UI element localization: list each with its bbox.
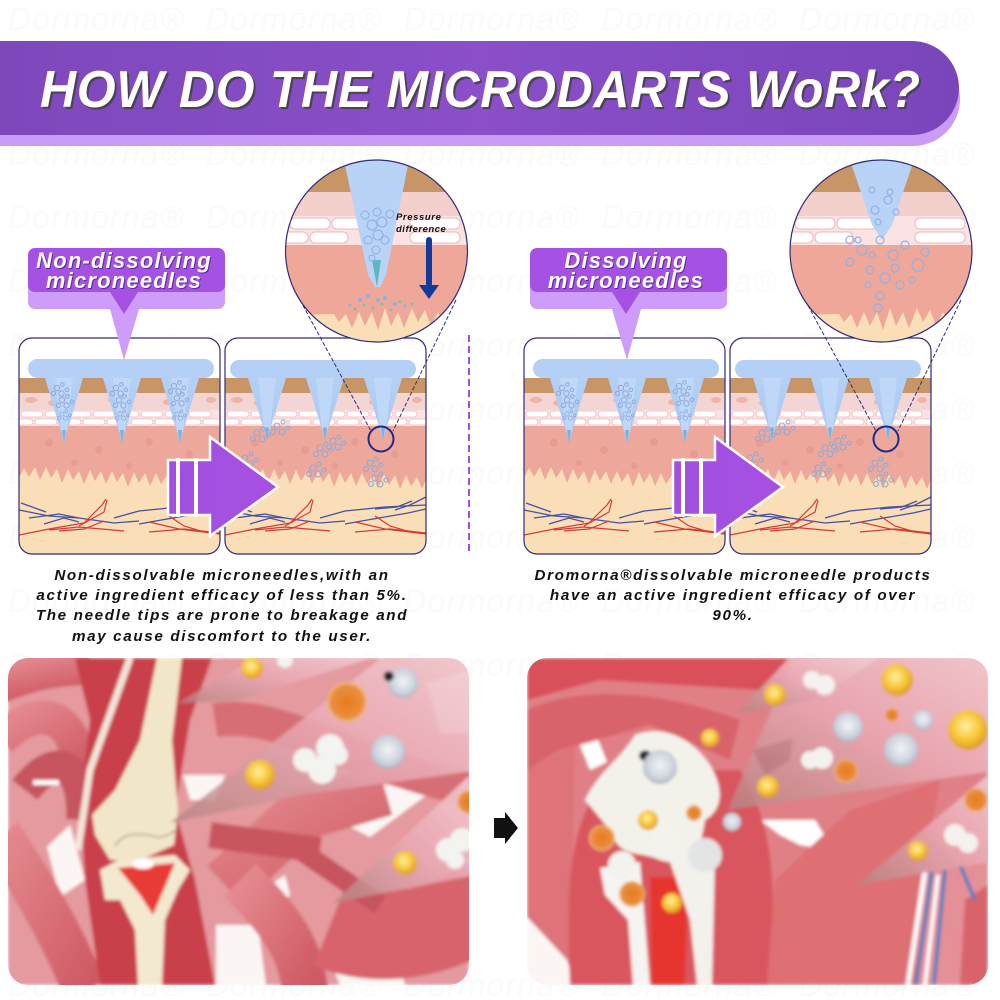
pressure arrow (426, 240, 432, 284)
magnifier: left zoom (282, 160, 469, 452)
callout: non-dissolving: microneedles (46, 268, 202, 293)
needle tips (728, 655, 1000, 810)
caption: dissolving: 90%. (712, 607, 754, 624)
divider (468, 335, 470, 553)
caption: non-dissolving: Non-dissolvable microneedles,with an (54, 567, 390, 584)
magnifier: left zoom: difference (396, 224, 446, 235)
callout: dissolving (530, 248, 727, 360)
caption: dissolving: have an active ingredient efficacy of over (550, 587, 916, 604)
caption: dissolving (534, 567, 932, 624)
callout: non-dissolving: Non-dissolving (36, 248, 212, 273)
tibia bone (100, 855, 190, 985)
caption: non-dissolving: may cause discomfort to the user. (72, 628, 372, 645)
image: knee before treatment (0, 652, 490, 990)
caption: non-dissolving: active ingredient efficacy of less than 5%. (36, 587, 408, 604)
gaps (527, 917, 575, 985)
title text: HOW DO THE MICRODARTS WoRk? (40, 60, 920, 118)
skin diagram after (217, 338, 431, 554)
muscle column (75, 658, 215, 985)
femur bone (92, 658, 182, 860)
image: knee after treatment (527, 655, 1000, 985)
central muscle (568, 770, 773, 985)
caption: non-dissolving (36, 567, 408, 645)
background watermark: Dormorna® Dormorna® Dormorna® Dormorna® Dormorna® (8, 583, 976, 619)
background watermark: Dormorna® Dormorna® Dormorna® Dormorna® Dormorna® (8, 1, 976, 37)
panel: non-dissolving microneedles (11, 338, 431, 554)
callout: dissolving: microneedles (548, 268, 704, 293)
caption: dissolving: Dromorna®dissolvable microneedle products (534, 567, 932, 584)
blue vessels (916, 865, 975, 985)
skin diagram before (11, 338, 225, 554)
background watermark: Dormorna® Dormorna® Dormorna® Dormorna® Dormorna® (8, 519, 976, 555)
arrow between images (494, 812, 518, 844)
white bones (600, 862, 650, 985)
lower right muscle block (767, 780, 940, 985)
background watermark: Dormorna® Dormorna® Dormorna® Dormorna® Dormorna® (8, 647, 976, 683)
background watermark: Dormorna® Dormorna® Dormorna® Dormorna® Dormorna® (8, 263, 976, 299)
caption: non-dissolving: The needle tips are prone to breakage and (36, 607, 408, 624)
background watermark: Dormorna® Dormorna® Dormorna® Dormorna® Dormorna® (8, 391, 976, 427)
magnifier: right zoom (787, 160, 974, 452)
background watermark: Dormorna® Dormorna® Dormorna® Dormorna® Dormorna® (8, 199, 976, 235)
callout: dissolving: Dissolving (564, 248, 688, 273)
arrow (168, 437, 278, 536)
spheres (764, 684, 786, 706)
title banner (0, 41, 960, 146)
panel: dissolving microneedles (516, 338, 936, 554)
callout: non-dissolving (28, 248, 225, 360)
background watermark: Dormorna® Dormorna® Dormorna® Dormorna® Dormorna® (8, 455, 976, 491)
pressure label: Pressure (396, 212, 442, 223)
dissolving foam (585, 731, 720, 863)
top band and side muscles (527, 658, 790, 700)
background watermark: Dormorna® Dormorna® Dormorna® Dormorna® Dormorna® (8, 136, 976, 172)
gaps between tubes (47, 670, 469, 985)
background watermark: Dormorna® Dormorna® Dormorna® Dormorna® Dormorna® (8, 327, 976, 363)
needle tips (170, 655, 490, 823)
active ingredient spheres (241, 657, 263, 679)
